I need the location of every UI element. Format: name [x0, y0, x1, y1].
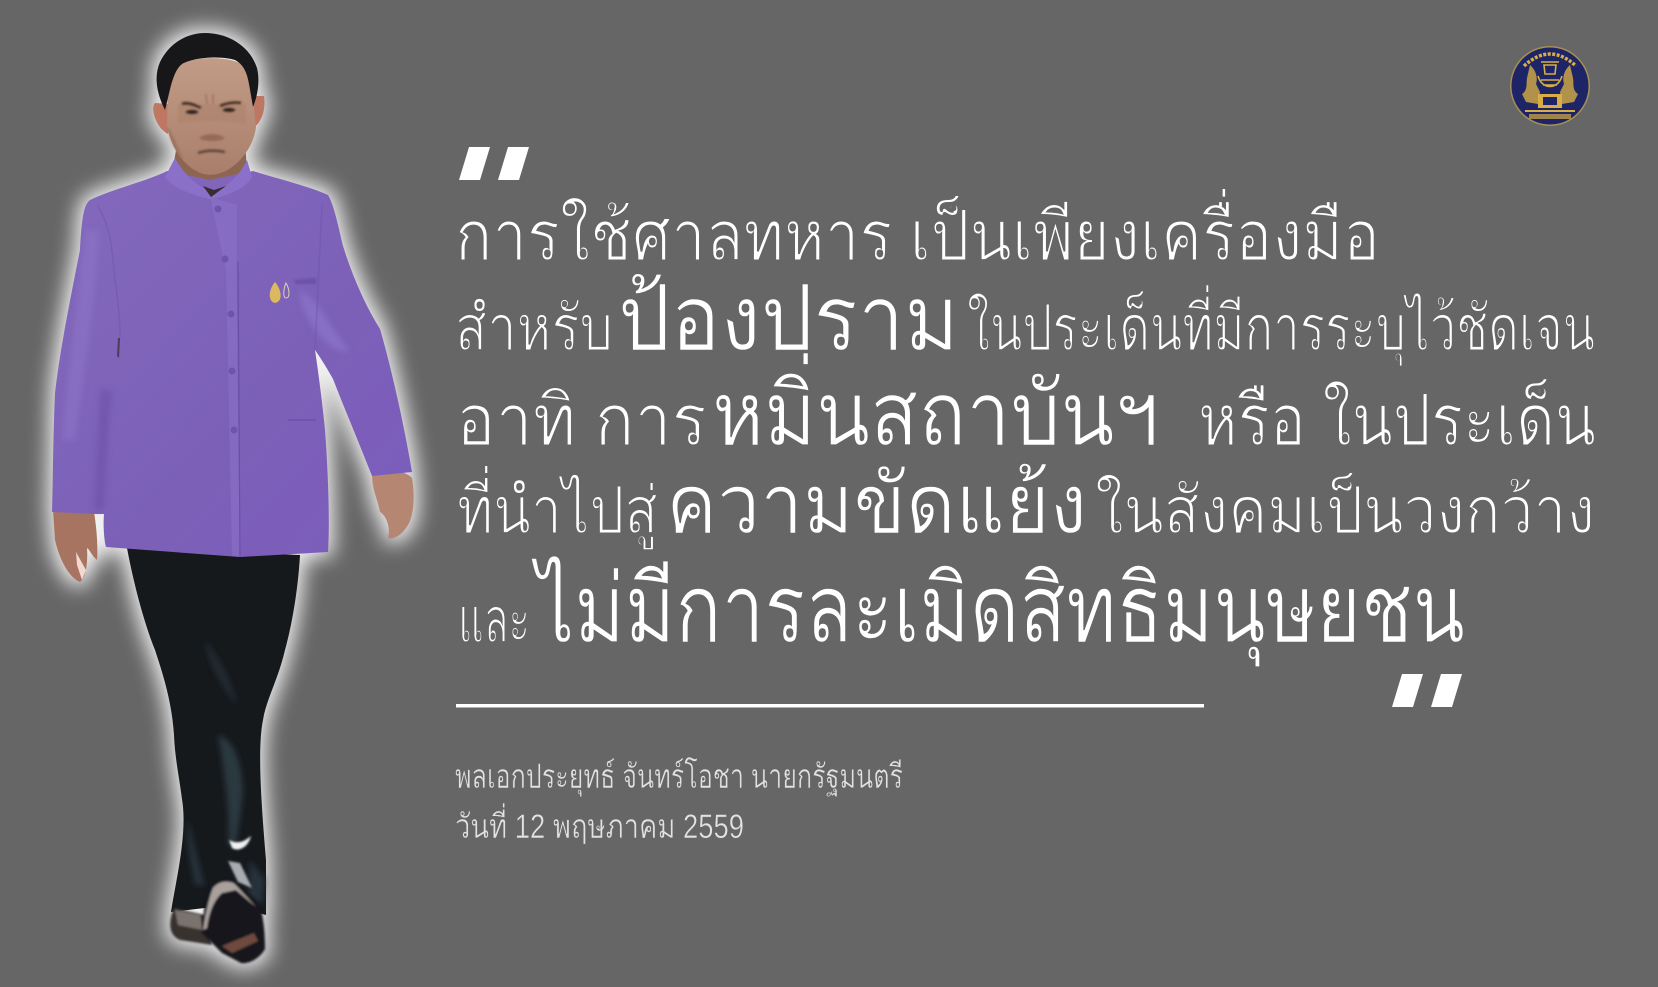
line 1: การใช้ศาลทหาร เป็นเพียงเครื่องมือ — [455, 188, 1380, 275]
hair — [157, 33, 258, 110]
line 4 tail: ในสังคมเป็นวงกว้าง — [1095, 471, 1595, 547]
jacket shading — [62, 230, 350, 510]
trouser highlights — [228, 836, 252, 888]
neck opening — [203, 186, 226, 197]
quote text — [455, 188, 1596, 668]
left hand — [53, 510, 97, 582]
jacket body — [52, 171, 412, 557]
neck — [172, 140, 247, 198]
figure: man in purple jacket walking — [52, 33, 414, 963]
line 2 emphasis: ป้องปราม — [618, 268, 959, 370]
face — [167, 58, 256, 175]
seal ornaments — [1524, 54, 1576, 86]
back shoe — [170, 908, 212, 945]
front shoe sole — [202, 880, 265, 963]
jacket buttons — [214, 206, 238, 434]
line 3 emphasis: หมิ่นสถาบันฯ — [712, 352, 1159, 465]
quote mark: closing — [1392, 674, 1462, 707]
divider line — [456, 704, 1204, 708]
ears — [153, 96, 264, 134]
armpit slit — [117, 338, 120, 358]
line 4 lead: ที่นำไปสู่ — [457, 465, 658, 551]
trousers — [127, 548, 300, 915]
facial features — [167, 94, 246, 172]
quote mark: opening — [459, 147, 529, 180]
emblem: government seal — [1510, 46, 1590, 126]
attribution: name and title: พลเอกประยุทธ์ จันทร์โอชา นายกรัฐมนตรี — [455, 757, 903, 797]
line 3 lead: อาทิ การ — [456, 381, 707, 461]
attribution: date: วันที่ 12 พฤษภาคม 2559 — [455, 803, 744, 846]
jacket sleeve seams — [97, 205, 322, 350]
jacket collar — [165, 158, 252, 199]
jacket placket — [210, 197, 240, 557]
line 5 lead: และ — [458, 584, 530, 656]
pocket and pin — [270, 278, 316, 420]
right hand — [372, 471, 414, 538]
line 4 emphasis: ความขัดแย้ง — [666, 457, 1087, 551]
trouser shading — [187, 640, 265, 905]
line 2 lead: สำหรับ — [455, 292, 613, 364]
